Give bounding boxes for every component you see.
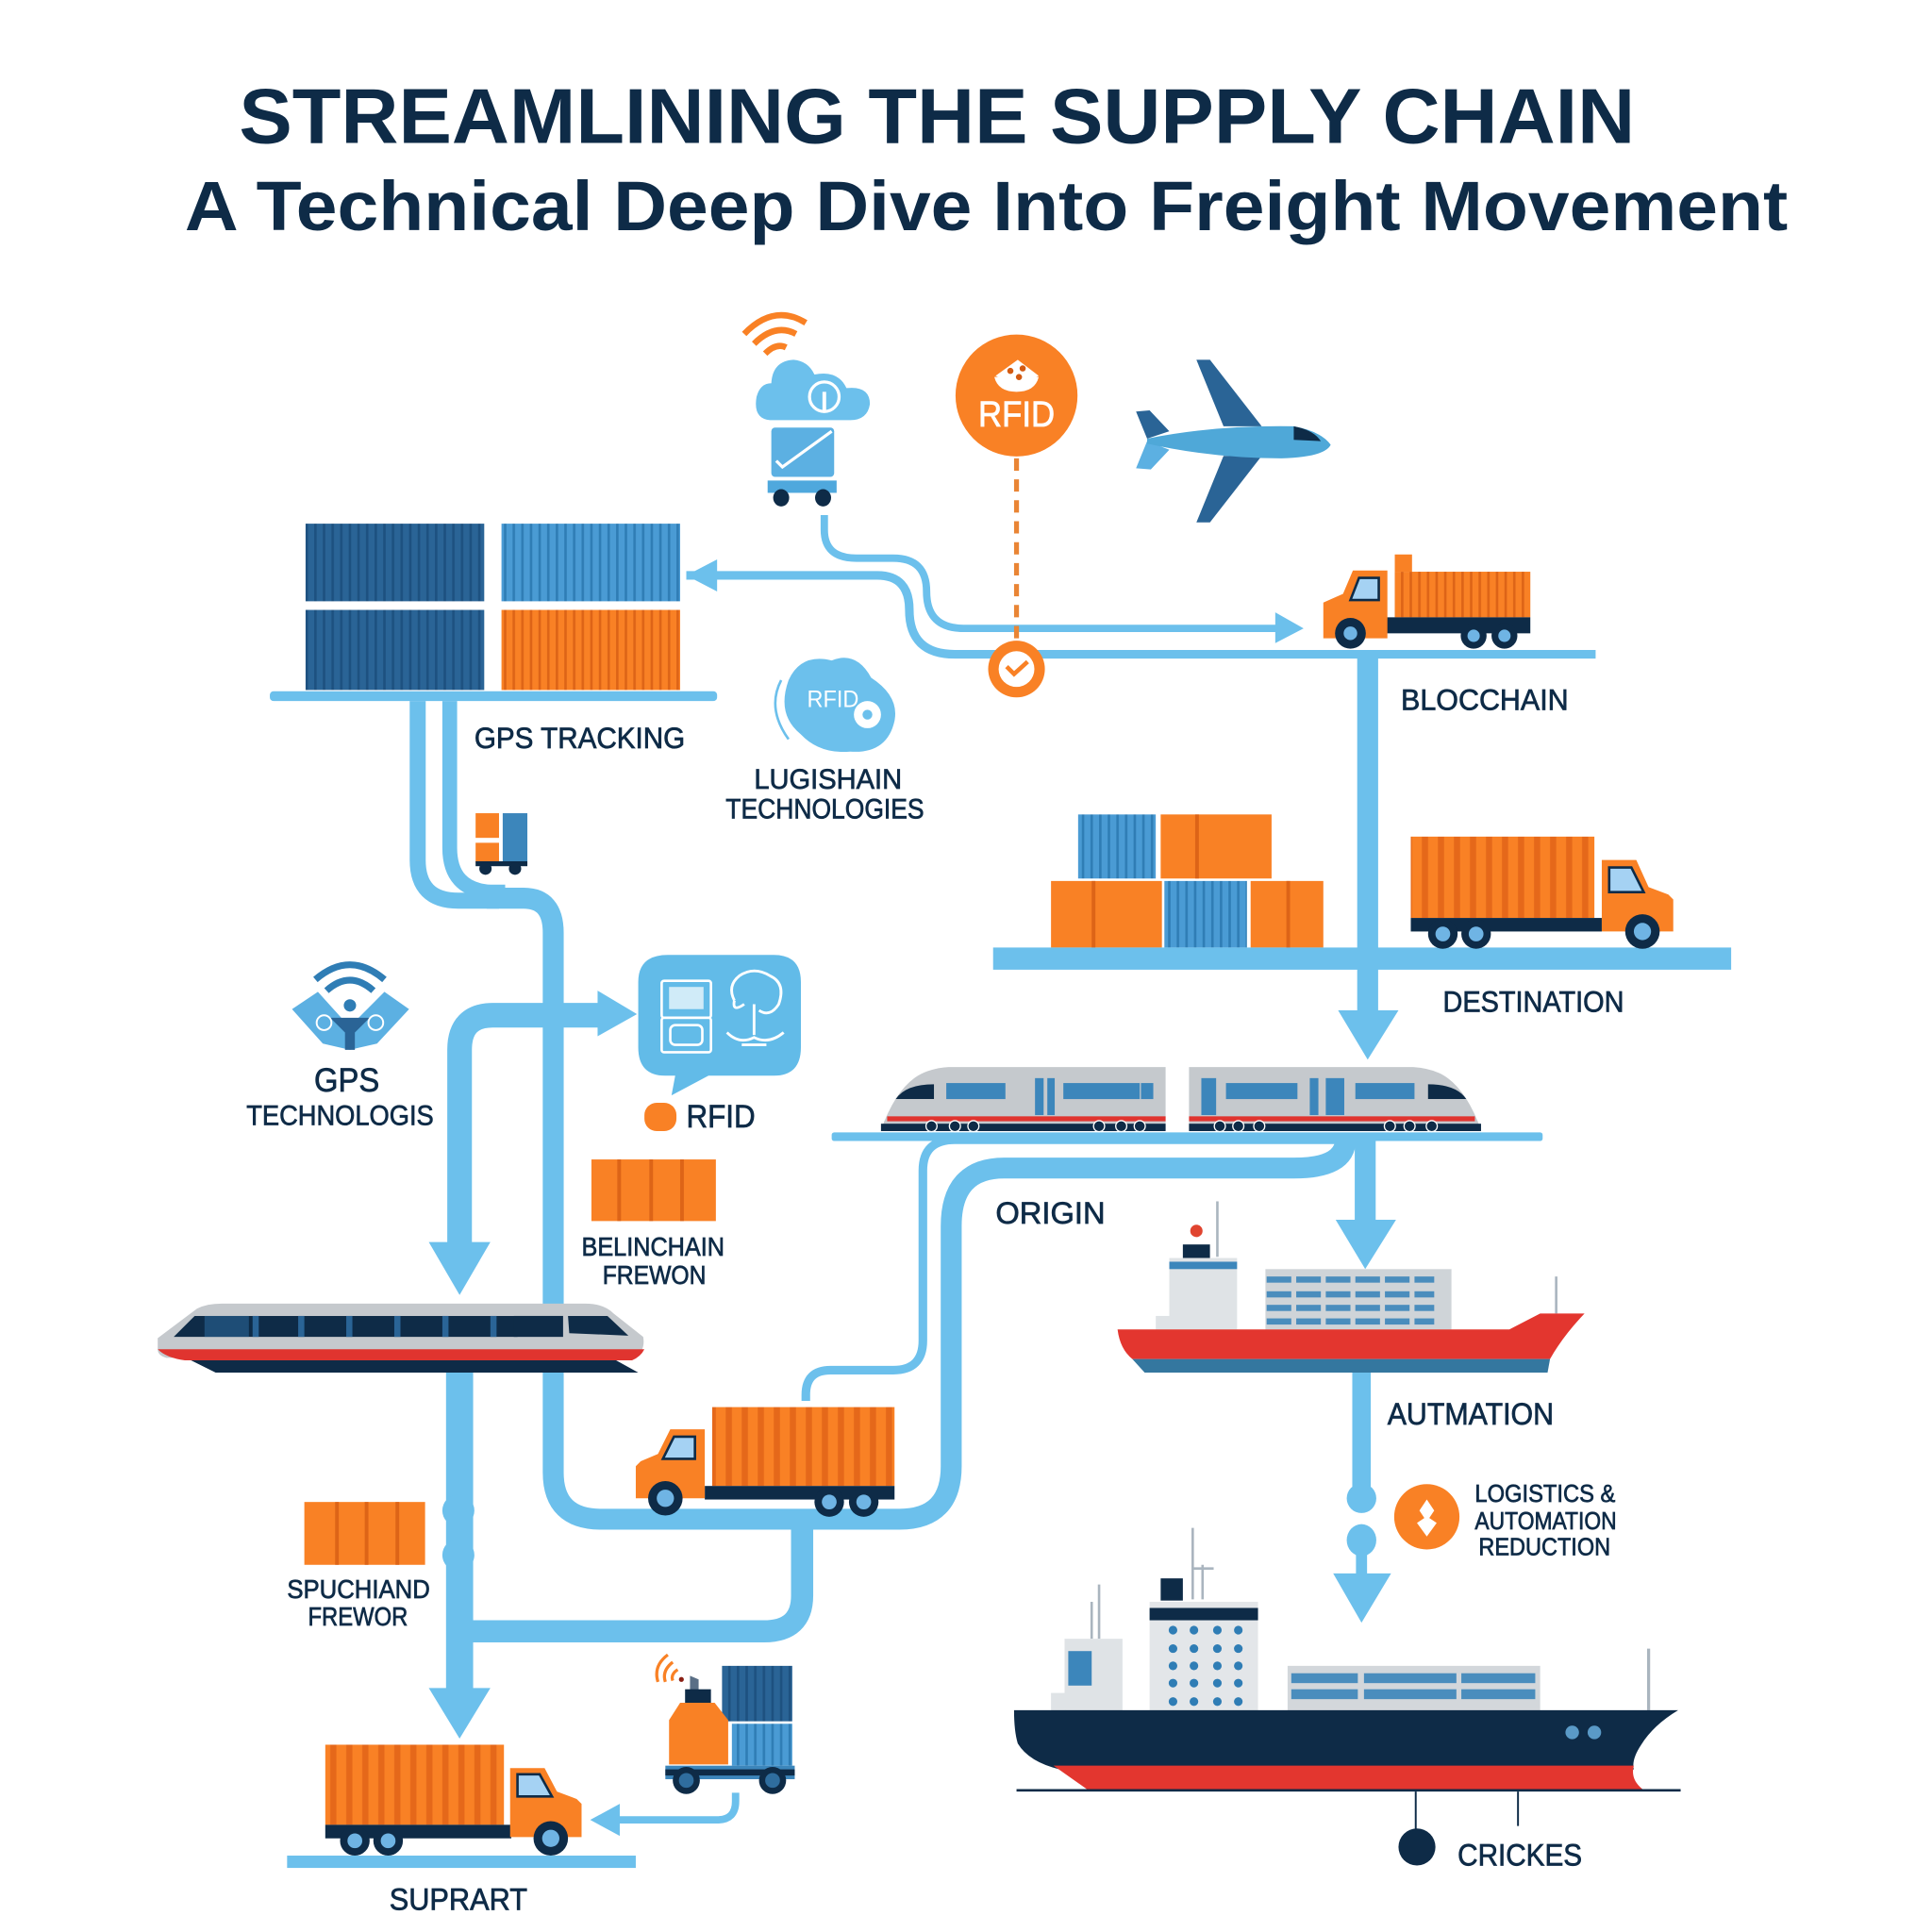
label: BELINCHAIN FREWON: BELINCHAIN	[581, 1232, 724, 1261]
destination platform with cargo	[993, 814, 1731, 970]
label: CRICKES with marker: CRICKES	[1457, 1837, 1582, 1872]
title: A Technical Deep Dive Into Freight Movement	[185, 167, 1788, 245]
icon: RFID cloud	[775, 658, 895, 752]
dashed RFID connector	[1015, 458, 1019, 641]
label: GPS TECHNOLOGIS: GPS	[314, 1062, 379, 1099]
label: GPS TECHNOLOGIS	[246, 1062, 434, 1131]
icon: logistics badge	[1394, 1484, 1459, 1549]
label: SPUCHIAND FREWOR	[287, 1574, 430, 1631]
label: SUPRART: SUPRART	[390, 1881, 527, 1916]
label: CRICKES with marker	[1398, 1828, 1582, 1872]
label: logistics and automation reduction: REDUCTION	[1478, 1532, 1610, 1560]
label: DESTINATION: DESTINATION	[1442, 985, 1624, 1018]
label: ORIGIN: ORIGIN	[995, 1195, 1106, 1230]
label: GPS TRACKING: GPS TRACKING	[475, 722, 685, 755]
label: RFID with orange marker: RFID	[687, 1099, 756, 1135]
title: STREAMLINING THE SUPPLY CHAIN	[239, 75, 1635, 160]
label: SPUCHIAND FREWOR: SPUCHIAND	[287, 1574, 430, 1604]
truck: origin	[636, 1407, 894, 1517]
label: BELINCHAIN FREWON	[581, 1232, 724, 1290]
label: AUTMATION: AUTMATION	[1388, 1396, 1554, 1431]
flow arrowheads and junctions	[429, 559, 1398, 1739]
label: logistics and automation reduction: LOGISTICS &	[1474, 1479, 1615, 1507]
label: LUGISHAIN TECHNOLOGIES: TECHNOLOGIES	[725, 793, 924, 824]
suprart platform	[287, 1856, 636, 1868]
train: two cars	[881, 1067, 1481, 1132]
arrow: loader to truck	[591, 1792, 736, 1836]
ship: navy container ship	[1014, 1528, 1681, 1830]
small cargo cart on line	[475, 813, 527, 874]
icon: speech bubble with barcode and tree	[639, 955, 801, 1095]
label: BELINCHAIN FREWON: FREWON	[603, 1260, 706, 1290]
flow lines network	[418, 515, 1595, 1694]
truck: suprart	[325, 1744, 581, 1856]
icon: RFID circle badge: RFID	[978, 395, 1055, 435]
label: RFID with orange marker	[644, 1099, 756, 1135]
icon: RFID cloud: RFID	[808, 688, 858, 713]
icon: GPS wifi	[292, 965, 409, 1050]
label: SPUCHIAND FREWOR: FREWOR	[308, 1602, 408, 1631]
label: GPS TECHNOLOGIS: TECHNOLOGIS	[246, 1100, 434, 1131]
label: LUGISHAIN TECHNOLOGIES	[725, 764, 924, 824]
truck: blocchain top	[1324, 555, 1530, 649]
train: long passenger	[158, 1304, 644, 1373]
label: LUGISHAIN TECHNOLOGIES: LUGISHAIN	[754, 764, 902, 795]
icon: RFID circle badge	[956, 335, 1077, 457]
truck: destination	[1411, 837, 1674, 949]
label: logistics and automation reduction: AUTOMATION	[1474, 1507, 1617, 1535]
icon: loader vehicle with containers	[657, 1655, 794, 1794]
icon: orange container mid	[591, 1159, 716, 1221]
icon: orange container lower	[305, 1502, 425, 1565]
icon: airplane	[1136, 359, 1331, 523]
title	[185, 75, 1788, 245]
container stack	[270, 524, 717, 701]
rail platform	[832, 1132, 1542, 1141]
icon: cloud cart with wifi	[744, 315, 870, 507]
label: logistics and automation reduction	[1474, 1479, 1617, 1560]
ship: red cargo ship	[1118, 1201, 1585, 1373]
icon: checkpoint	[989, 641, 1045, 697]
label: BLOCCHAIN: BLOCCHAIN	[1401, 683, 1569, 716]
